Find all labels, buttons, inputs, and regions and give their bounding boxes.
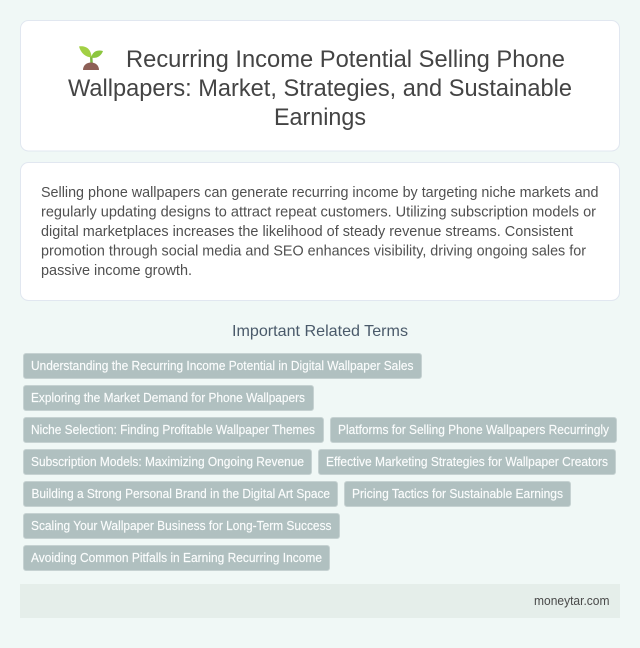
tag 8: Pricing Tactics for Sustainable Earnings bbox=[352, 487, 563, 501]
tag 8 bbox=[344, 482, 570, 506]
summary text bbox=[41, 185, 598, 279]
tag 10 bbox=[24, 546, 330, 570]
title text bbox=[68, 46, 572, 131]
panel: summary card bbox=[20, 162, 620, 300]
tag 5: Subscription Models: Maximizing Ongoing Revenue bbox=[31, 455, 304, 469]
tag 2: Exploring the Market Demand for Phone Wallpapers bbox=[31, 391, 305, 405]
summary text: promotion through social media and SEO enhances visibility, driving ongoing sales for bbox=[41, 244, 586, 260]
tag 7: Building a Strong Personal Brand in the Digital Art Space bbox=[32, 487, 330, 501]
summary text: regularly updating designs to attract repeat customers. Utilizing subscription models or bbox=[41, 204, 596, 220]
tag 5 bbox=[24, 450, 312, 474]
title text: Earnings bbox=[274, 104, 366, 131]
tag 1: Understanding the Recurring Income Potential in Digital Wallpaper Sales bbox=[31, 359, 414, 373]
tag 10: Avoiding Common Pitfalls in Earning Recurring Income bbox=[31, 551, 322, 565]
tag 7 bbox=[24, 482, 338, 506]
heading: important related terms: Important Related Terms bbox=[232, 323, 408, 340]
panel: related term tags bbox=[24, 354, 616, 570]
tag 2 bbox=[24, 386, 314, 410]
summary text: Selling phone wallpapers can generate recurring income by targeting niche markets and bbox=[41, 185, 598, 201]
tag 3: Niche Selection: Finding Profitable Wallpaper Themes bbox=[31, 423, 315, 437]
tag 4: Platforms for Selling Phone Wallpapers Recurringly bbox=[338, 423, 610, 437]
tag 1 bbox=[24, 354, 422, 378]
title text: Recurring Income Potential Selling Phone bbox=[126, 46, 565, 73]
panel: title card bbox=[20, 20, 620, 151]
footer bar bbox=[20, 584, 620, 618]
footer source text: moneytar.com bbox=[534, 594, 610, 608]
tag 6 bbox=[318, 450, 616, 474]
summary text: passive income growth. bbox=[41, 263, 192, 279]
tag 3 bbox=[24, 418, 324, 442]
tag 9 bbox=[24, 514, 340, 538]
icon: seedling bbox=[79, 46, 103, 70]
title text: Wallpapers: Market, Strategies, and Sustainable bbox=[68, 75, 572, 102]
summary text: digital marketplaces increases the likelihood of steady revenue streams. Consistent bbox=[41, 224, 573, 240]
tag 6: Effective Marketing Strategies for Wallpaper Creators bbox=[326, 455, 608, 469]
tag 9: Scaling Your Wallpaper Business for Long-Term Success bbox=[31, 519, 332, 533]
tag 4 bbox=[330, 418, 616, 442]
